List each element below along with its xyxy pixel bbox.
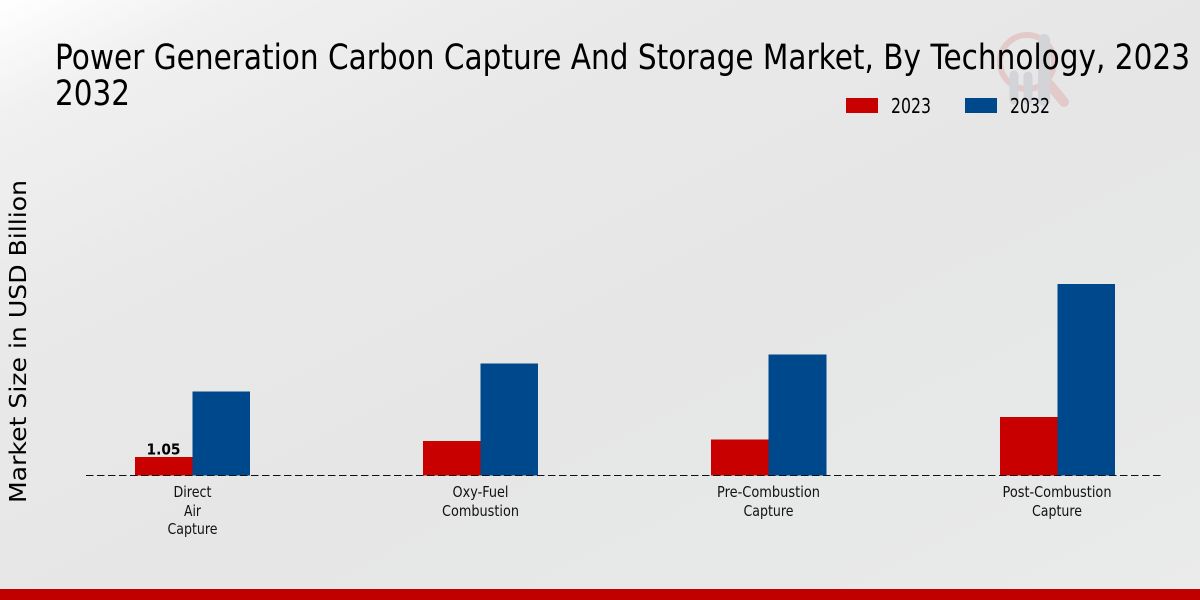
bar chart [86, 284, 1164, 538]
category label: Oxy-Fuel Combustion [442, 483, 519, 520]
category label: Direct Air Capture [168, 483, 218, 538]
category label: Direct Air Capture: Capture [168, 520, 218, 538]
category label: Direct Air Capture: Direct [174, 483, 212, 501]
category label: Pre-Combustion Capture [717, 483, 820, 520]
category label: Post-Combustion Capture [1002, 483, 1112, 520]
category label: Post-Combustion Capture: Capture [1032, 502, 1082, 520]
title [55, 38, 1190, 114]
category label: Direct Air Capture: Air [184, 502, 202, 520]
category label: Oxy-Fuel Combustion: Oxy-Fuel [452, 483, 508, 501]
x-axis baseline [86, 474, 1164, 476]
legend [846, 94, 1050, 118]
category label: Pre-Combustion Capture: Capture [744, 502, 794, 520]
bars: Oxy-Fuel Combustion [423, 364, 538, 476]
category label: Pre-Combustion Capture: Pre-Combustion [717, 483, 820, 501]
icon: watermark logo [1000, 35, 1064, 102]
y-axis label: Market Size in USD Billion [4, 180, 32, 503]
footer bar [0, 589, 1200, 600]
value label: 1.05: 1.05 [146, 440, 180, 458]
bars: Pre-Combustion Capture [711, 354, 826, 476]
legend item: 2032: 2032 [1010, 94, 1050, 118]
category label: Oxy-Fuel Combustion: Combustion [442, 502, 519, 520]
legend item: 2023: 2023 [891, 94, 931, 118]
category label: Post-Combustion Capture: Post-Combustion [1002, 483, 1112, 501]
legend item: 2023 [846, 94, 931, 118]
bars: Post-Combustion Capture [1000, 284, 1115, 476]
legend item: 2032 [965, 94, 1050, 118]
bars: Direct Air Capture [135, 392, 250, 476]
title: 2032 [55, 74, 130, 114]
